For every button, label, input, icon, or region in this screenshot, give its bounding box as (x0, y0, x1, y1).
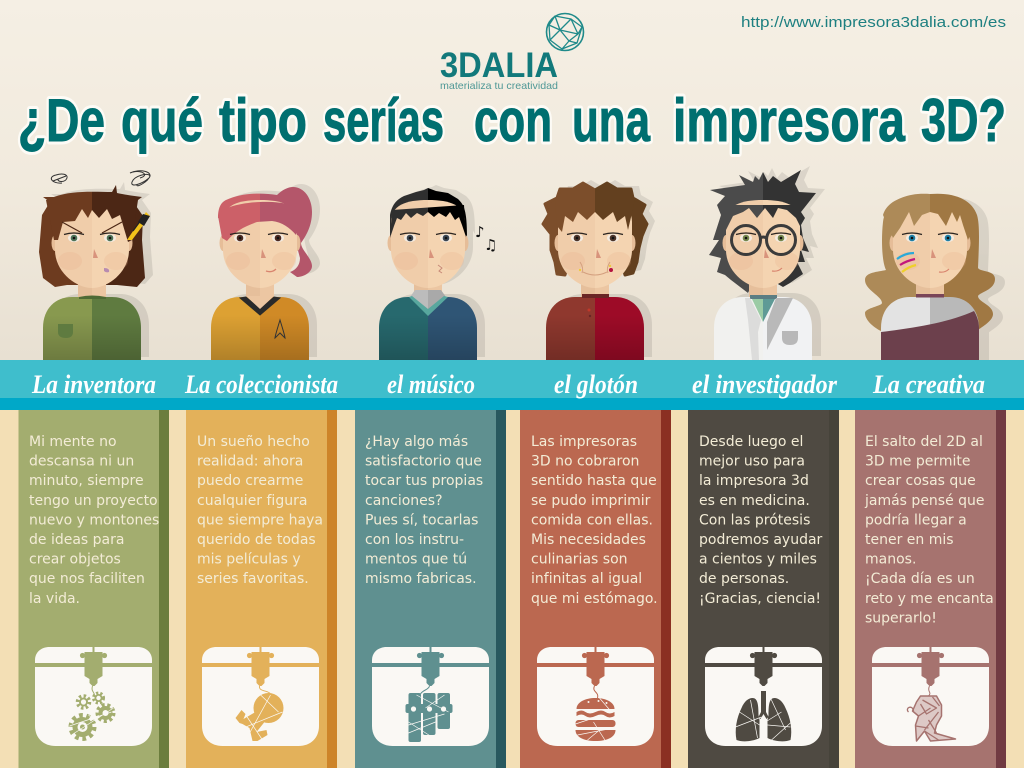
character: la inventora (39, 171, 153, 360)
icon: pencil (127, 212, 150, 240)
text: el músico: Pues sí, tocarlas (365, 512, 478, 528)
name: la inventora: La inventora (31, 370, 156, 399)
text: la inventora: minuto, siempre (29, 473, 144, 489)
text: la coleccionista: que siempre haya (197, 512, 323, 528)
text: la inventora: la vida. (29, 591, 80, 607)
text: la inventora: que nos faciliten (29, 571, 145, 587)
icon: 3d printer printing gears (35, 646, 152, 746)
text: la creativa: manos. (865, 552, 916, 568)
text: el investigador: ¡Gracias, ciencia! (699, 591, 821, 607)
text: el investigador: podremos ayudar (699, 532, 823, 548)
text: el músico: con los instru- (365, 532, 464, 548)
paper background (0, 0, 1024, 362)
icon: 3d printer printing pan flute (372, 646, 489, 746)
text: el músico: mentos que tú (365, 552, 467, 568)
title: impresora (673, 87, 905, 154)
text: el glotón: comida con ellas. (531, 512, 653, 528)
text: la creativa: ¡Cada día es un (865, 571, 975, 587)
panel: la inventora (18, 410, 169, 768)
text: el músico: satisfactorio que (365, 454, 482, 470)
website url: http://www.impresora3dalia.com/es (741, 14, 1006, 31)
text: el investigador: la impresora 3d (699, 473, 809, 489)
icon: 3d printer printing figure (202, 646, 319, 746)
text: el glotón: infinitas al igual (531, 571, 642, 587)
text: el glotón: Mis necesidades (531, 532, 646, 548)
text: el glotón: se pudo imprimir (531, 493, 651, 509)
text: la creativa: jamás pensé que (864, 493, 985, 509)
name: la creativa: La creativa (872, 370, 985, 399)
logo tagline: materializa tu creatividad (440, 80, 558, 92)
banner: names ribbon (0, 360, 1024, 410)
icon: scribble thoughts (51, 171, 150, 186)
text: el músico: tocar tus propias (365, 473, 483, 489)
panel: el músico (355, 410, 506, 768)
text: el investigador: Con las prótesis (699, 512, 810, 528)
text: el músico: mismo fabricas. (365, 571, 477, 587)
text: la coleccionista: cualquier figura (197, 493, 307, 509)
title: tipo (219, 87, 307, 154)
text: el glotón: culinarias son (531, 552, 628, 568)
character: el glotón (543, 180, 655, 360)
character: la creativa (865, 194, 1005, 363)
text: la coleccionista: mis películas y (197, 552, 301, 568)
icon: starfleet badge (275, 320, 285, 338)
lower cream background (0, 405, 1024, 768)
icon: 3d printer printing shoe (872, 646, 989, 746)
icon: music notes (475, 223, 497, 254)
character: el investigador (709, 166, 825, 360)
title (18, 87, 1006, 154)
title: una (572, 87, 650, 154)
name: el músico: el músico (387, 370, 475, 399)
logo wordmark: 3DALIA (440, 46, 558, 85)
text: la coleccionista: Un sueño hecho (197, 434, 310, 450)
text: la inventora: crear objetos (29, 552, 121, 568)
panel: la creativa (855, 410, 1006, 768)
panel: el investigador (688, 410, 839, 768)
text: el músico: canciones? (365, 493, 443, 509)
text: el investigador: es en medicina. (699, 493, 810, 509)
text: la inventora: Mi mente no (29, 434, 117, 450)
text: la inventora: tengo un proyecto (29, 493, 158, 509)
text: la creativa: reto y me encanta (865, 591, 994, 607)
icon: 3d printer printing lungs (705, 646, 822, 746)
text: la creativa: tener en mis (865, 532, 954, 548)
text: el músico: ¿Hay algo más (365, 434, 468, 450)
icon: polygon sphere (546, 14, 584, 50)
text: el glotón: que mi estómago. (531, 591, 658, 607)
text: la inventora: de ideas para (29, 532, 124, 548)
text: el glotón: Las impresoras (531, 434, 637, 450)
panel: la coleccionista (186, 410, 337, 768)
title: con (474, 87, 552, 154)
panel: el glotón (520, 410, 671, 768)
text: el investigador: de personas. (699, 571, 789, 587)
icon: music notes: ♫ (484, 236, 497, 254)
character: el músico (379, 185, 497, 360)
title: ¿De (18, 87, 105, 154)
icon: 3d printer printing burger (537, 646, 654, 746)
text: el investigador: mejor uso para (699, 454, 805, 470)
text: la creativa: podría llegar a (865, 512, 967, 528)
name: el investigador: el investigador (692, 370, 838, 399)
text: la coleccionista: series favoritas. (197, 571, 309, 587)
text: la creativa: crear cosas que (865, 473, 976, 489)
text: la coleccionista: puedo crearme (197, 473, 303, 489)
name: la coleccionista: La coleccionista (184, 370, 338, 399)
text: el investigador: Desde luego el (699, 434, 803, 450)
logo: 3Dalia (440, 14, 584, 92)
text: la coleccionista: realidad: ahora (197, 454, 303, 470)
text: el investigador: a cientos y miles (699, 552, 817, 568)
icon: glasses (732, 226, 796, 254)
name: el glotón: el glotón (554, 370, 638, 399)
text: la creativa: El salto del 2D al (865, 434, 983, 450)
text: la inventora: descansa ni un (29, 454, 134, 470)
title: serías (323, 87, 444, 154)
text: la inventora: nuevo y montones (29, 512, 159, 528)
text: el glotón: sentido hasta que (531, 473, 657, 489)
title: qué (121, 87, 203, 154)
text: la creativa: superarlo! (865, 610, 937, 626)
character: la coleccionista (211, 184, 320, 360)
text: el glotón: 3D no cobraron (531, 454, 639, 470)
text: la coleccionista: querido de todas (197, 532, 316, 548)
text: la creativa: 3D me permite (865, 454, 970, 470)
icon: music notes: ♪ (475, 223, 485, 241)
